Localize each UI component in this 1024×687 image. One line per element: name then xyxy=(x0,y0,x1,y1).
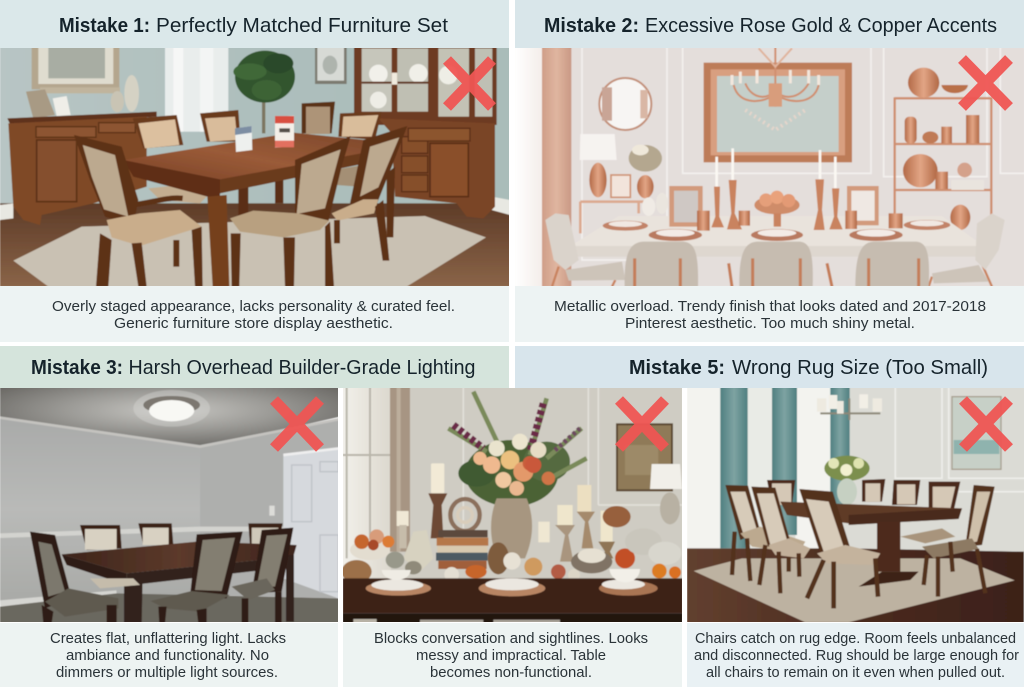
photo: matched furniture dining room xyxy=(0,47,510,287)
caption: mistake 5: and disconnected. Rug should be large enough for xyxy=(694,648,1019,664)
area rug xyxy=(13,216,486,287)
table lamp xyxy=(580,134,617,197)
heading: mistake 5: Wrong Rug Size (Too Small) xyxy=(732,357,988,379)
photo: harsh overhead lighting room xyxy=(0,385,340,625)
caption: mistake 2: Metallic overload. Trendy finish that looks dated and 2017-2018 xyxy=(554,299,986,315)
caption: mistake 5: Chairs catch on rug edge. Room feels unbalanced xyxy=(695,631,1016,647)
heading: mistake 2: Excessive Rose Gold & Copper Accents xyxy=(645,15,997,37)
sideboard with framed signs xyxy=(7,75,157,225)
upholstered chairs xyxy=(545,213,1005,287)
caption: mistake 5 xyxy=(687,623,1024,687)
ceiling light fixture xyxy=(133,390,210,427)
panel: mistake 5 xyxy=(515,346,1024,687)
back chairs xyxy=(767,479,960,518)
panel: mistake 2 xyxy=(515,0,1024,342)
pedestal table xyxy=(780,502,962,587)
icon: red X mark xyxy=(962,59,1009,107)
caption: mistake 3: dimmers or multiple light sources. xyxy=(56,665,278,681)
photo: rose gold dining room xyxy=(515,47,1024,287)
round mirror xyxy=(599,78,651,130)
heading: mistake 1: Mistake 1: xyxy=(59,15,150,37)
wooden table xyxy=(343,578,683,623)
front chairs xyxy=(30,528,293,623)
caption: mistake 5: all chairs to remain on it even when pulled out. xyxy=(706,665,1005,681)
dining table xyxy=(570,216,984,257)
heading: mistake 5: Mistake 5: xyxy=(629,357,725,379)
back chairs xyxy=(80,523,283,550)
chandelier xyxy=(732,47,819,130)
heading: mistake 2 xyxy=(515,0,1024,48)
chandelier xyxy=(817,394,882,420)
copper shelving unit xyxy=(895,68,991,253)
caption: mistake 3 xyxy=(0,623,338,687)
heading: mistake 1: Perfectly Matched Furniture Set xyxy=(156,15,448,37)
flowers and vase xyxy=(824,456,870,505)
heading: mistake 3: Harsh Overhead Builder-Grade Lighting xyxy=(128,357,476,379)
caption: cluttered centerpiece xyxy=(343,623,682,687)
panel: cluttered centerpiece (mistake 4) xyxy=(342,385,683,687)
wall moulding xyxy=(582,47,1024,260)
heading: mistake 3 xyxy=(0,346,509,388)
heading: mistake 2: Mistake 2: xyxy=(544,15,639,37)
caption: cluttered centerpiece: Blocks conversation and sightlines. Looks xyxy=(374,631,648,647)
back chairs xyxy=(133,102,382,203)
fruit and decor pile xyxy=(342,506,682,583)
caption: mistake 2: Pinterest aesthetic. Too much shiny metal. xyxy=(625,316,915,332)
china hutch xyxy=(354,47,497,218)
dining table xyxy=(62,542,297,623)
heading: mistake 5 xyxy=(515,346,1024,388)
icon: red X mark xyxy=(274,400,320,448)
panel: mistake 3 xyxy=(0,346,509,687)
caption: mistake 3: Creates flat, unflattering light. Lacks xyxy=(50,631,286,647)
icon: red X mark xyxy=(963,400,1009,448)
candlesticks and frames xyxy=(642,148,903,231)
place settings xyxy=(603,220,950,241)
icon: red X mark xyxy=(447,60,492,107)
caption: mistake 1: Generic furniture store display aesthetic. xyxy=(114,316,393,332)
dining table xyxy=(123,133,365,287)
wall art xyxy=(952,397,1001,469)
panel: mistake 1 xyxy=(0,0,510,342)
console with frame and vase xyxy=(580,145,662,233)
side chairs xyxy=(725,485,995,608)
price cards on table xyxy=(235,116,294,152)
icon: red X mark xyxy=(619,400,665,448)
vase xyxy=(491,498,532,558)
wall painting xyxy=(32,47,120,93)
front chairs xyxy=(74,126,407,287)
caption: cluttered centerpiece: becomes non-functional. xyxy=(430,665,592,681)
potted plant xyxy=(233,51,295,133)
ornate mirror xyxy=(704,63,852,162)
photo: oversized centerpiece on table xyxy=(342,385,683,625)
table lamp xyxy=(650,464,682,524)
heading: mistake 3: Mistake 3: xyxy=(31,357,123,379)
tall floral arrangement xyxy=(448,392,587,507)
caption: mistake 1: Overly staged appearance, lacks personality & curated feel. xyxy=(52,299,455,315)
door xyxy=(283,448,340,599)
caption: cluttered centerpiece: messy and impractical. Table xyxy=(416,648,606,664)
caption: mistake 2 xyxy=(515,286,1024,342)
caption: mistake 1 xyxy=(0,286,509,342)
place settings xyxy=(366,569,658,596)
heading: mistake 1 xyxy=(0,0,509,48)
caption: mistake 3: ambiance and functionality. No xyxy=(66,648,269,664)
floor and rug xyxy=(687,548,1024,623)
wall painting xyxy=(617,424,672,490)
photo: dining room with small rug xyxy=(687,385,1024,625)
candles and books xyxy=(397,463,615,569)
